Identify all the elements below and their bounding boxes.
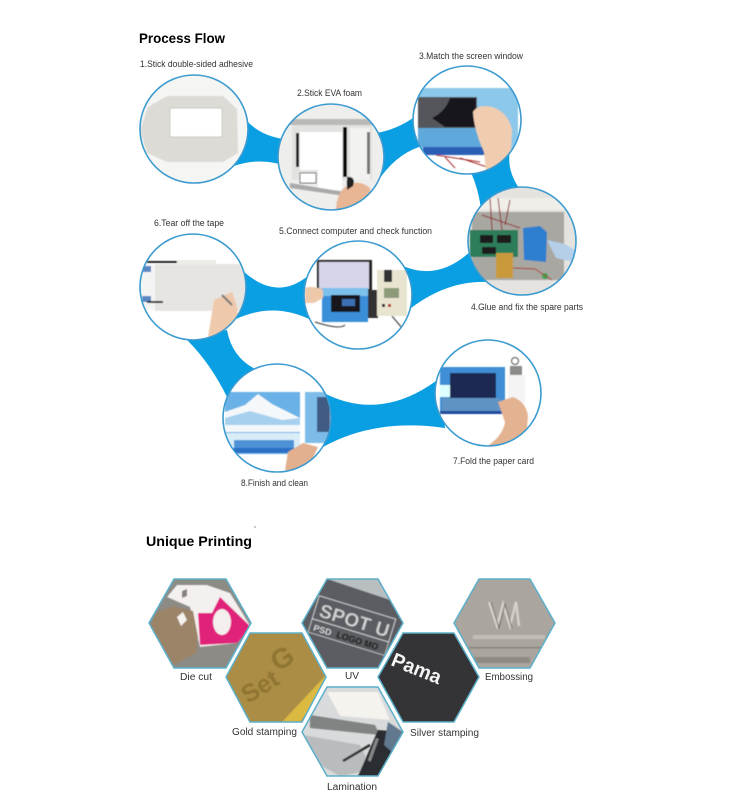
UV photo: LOGO MO [335,630,380,652]
embossing label: Embossing [485,672,533,683]
stray dot [254,526,256,528]
embossing outline [454,579,555,668]
die cut outline [149,579,251,668]
step 5 label: 5.Connect computer and check function [279,226,432,236]
heading: process flow: Process Flow [139,30,225,46]
step 7: fold the paper card [433,336,543,466]
step 4 photo [468,188,576,294]
lamination label: Lamination [327,782,377,793]
hexagon: gold stamping [222,630,330,738]
hexagon: UV [301,578,404,679]
gold stamping outline [226,633,326,722]
step 1 label: 1.Stick double-sided adhesive [140,59,253,69]
gold stamping photo: Set [236,664,285,709]
step 3 photo [414,87,519,173]
hexagon: embossing [450,575,560,683]
gold stamping photo: G [265,639,300,677]
step 8 label: 8.Finish and clean [241,478,308,488]
hexagon: die cut [148,578,252,680]
step 2 photo [278,104,384,210]
step 5 ring [304,241,412,349]
step 1 ring [140,75,248,183]
flow connectors [185,113,522,447]
step 3 label: 3.Match the screen window [419,51,523,61]
lamination outline [302,687,403,776]
embossing photo [454,580,554,668]
step 2 ring [278,104,384,210]
step 6 label: 6.Tear off the tape [154,218,224,228]
step 1 photo [140,75,248,183]
gold stamping label: Gold stamping [232,727,297,738]
heading: unique printing: Unique Printing [146,533,252,549]
step 4 label: 4.Glue and fix the spare parts [471,302,583,312]
step 7 label: 7.Fold the paper card [453,456,534,466]
step 8 photo [224,369,330,470]
infographic canvas [139,33,583,790]
step 7 photo [436,356,529,446]
UV outline [302,579,403,668]
silver stamping label: Silver stamping [410,728,479,739]
silver stamping photo: Pama [388,649,445,689]
step 2 label: 2.Stick EVA foam [297,88,362,98]
die cut photo [150,580,250,668]
gold stamping photo [226,634,326,722]
step 7 ring [435,340,541,446]
UV photo [302,580,402,668]
step 5: connect computer and check function [279,226,432,353]
step 4: glue and fix the spare parts [465,183,583,312]
step 4 ring [468,187,576,295]
hexagon: silver stamping [374,630,484,739]
step 6: tear off the tape [136,218,250,344]
lamination photo [303,688,402,776]
UV label: UV [345,671,359,682]
step 6 ring [140,234,246,340]
UV photo: SPOT U [317,601,392,642]
hexagon: lamination [301,686,404,790]
step 1: stick double-sided adhesive [140,59,253,183]
die cut label: Die cut [180,672,212,683]
step 6 photo [141,260,246,340]
step 2: stick EVA foam [275,88,387,215]
step 8: finish and clean [220,360,334,488]
step 3: match the screen window [410,51,525,177]
step 5 photo [304,259,412,328]
UV photo: PSD [312,623,333,638]
silver stamping outline [378,633,479,722]
step 8 ring [223,364,331,472]
step 3 ring [413,66,521,174]
